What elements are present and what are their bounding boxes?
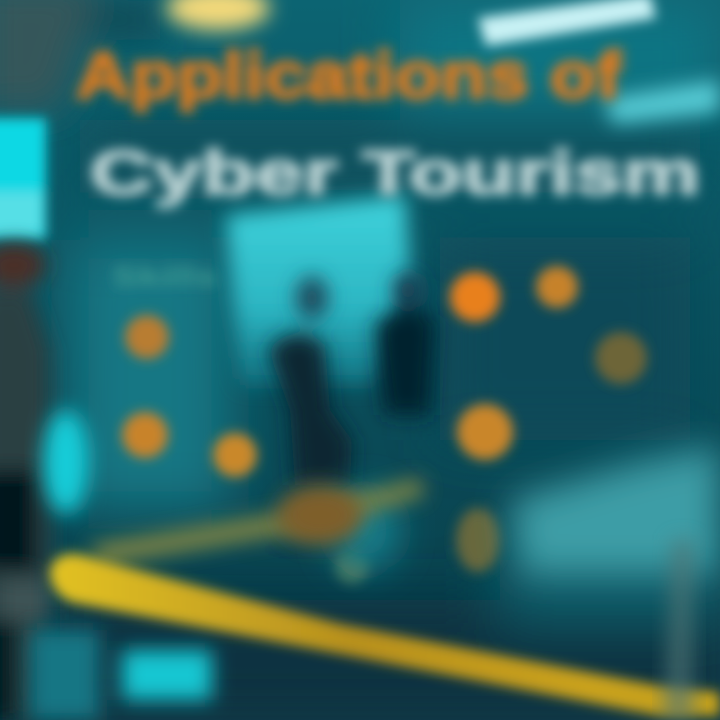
title line one: Applications of: [76, 38, 622, 112]
orange circle nodes: [122, 266, 647, 583]
left cyan screen: [0, 118, 46, 240]
bottom-left cyan glow: [30, 630, 212, 720]
central cyan panel: [226, 195, 412, 385]
cyan oval screen: [43, 410, 89, 514]
lower-right teal panel: [510, 445, 720, 575]
yellow stripe: [50, 554, 720, 716]
top-right light bar: [478, 0, 656, 46]
teal lower accent: [330, 490, 400, 570]
small caption: Skills: [112, 261, 217, 292]
title line two: Cyber Tourism: [90, 139, 700, 208]
central gold patch: [278, 485, 362, 545]
diagonal golden beam: [90, 478, 425, 565]
left foreground figure: [0, 243, 50, 720]
right cyan panel: [605, 80, 720, 124]
top-left dark panel: [0, 0, 160, 110]
silhouette: right person: [375, 272, 435, 415]
right vertical post: [664, 540, 694, 720]
silhouette: left person: [268, 276, 352, 485]
top yellow lamp: [166, 0, 270, 30]
